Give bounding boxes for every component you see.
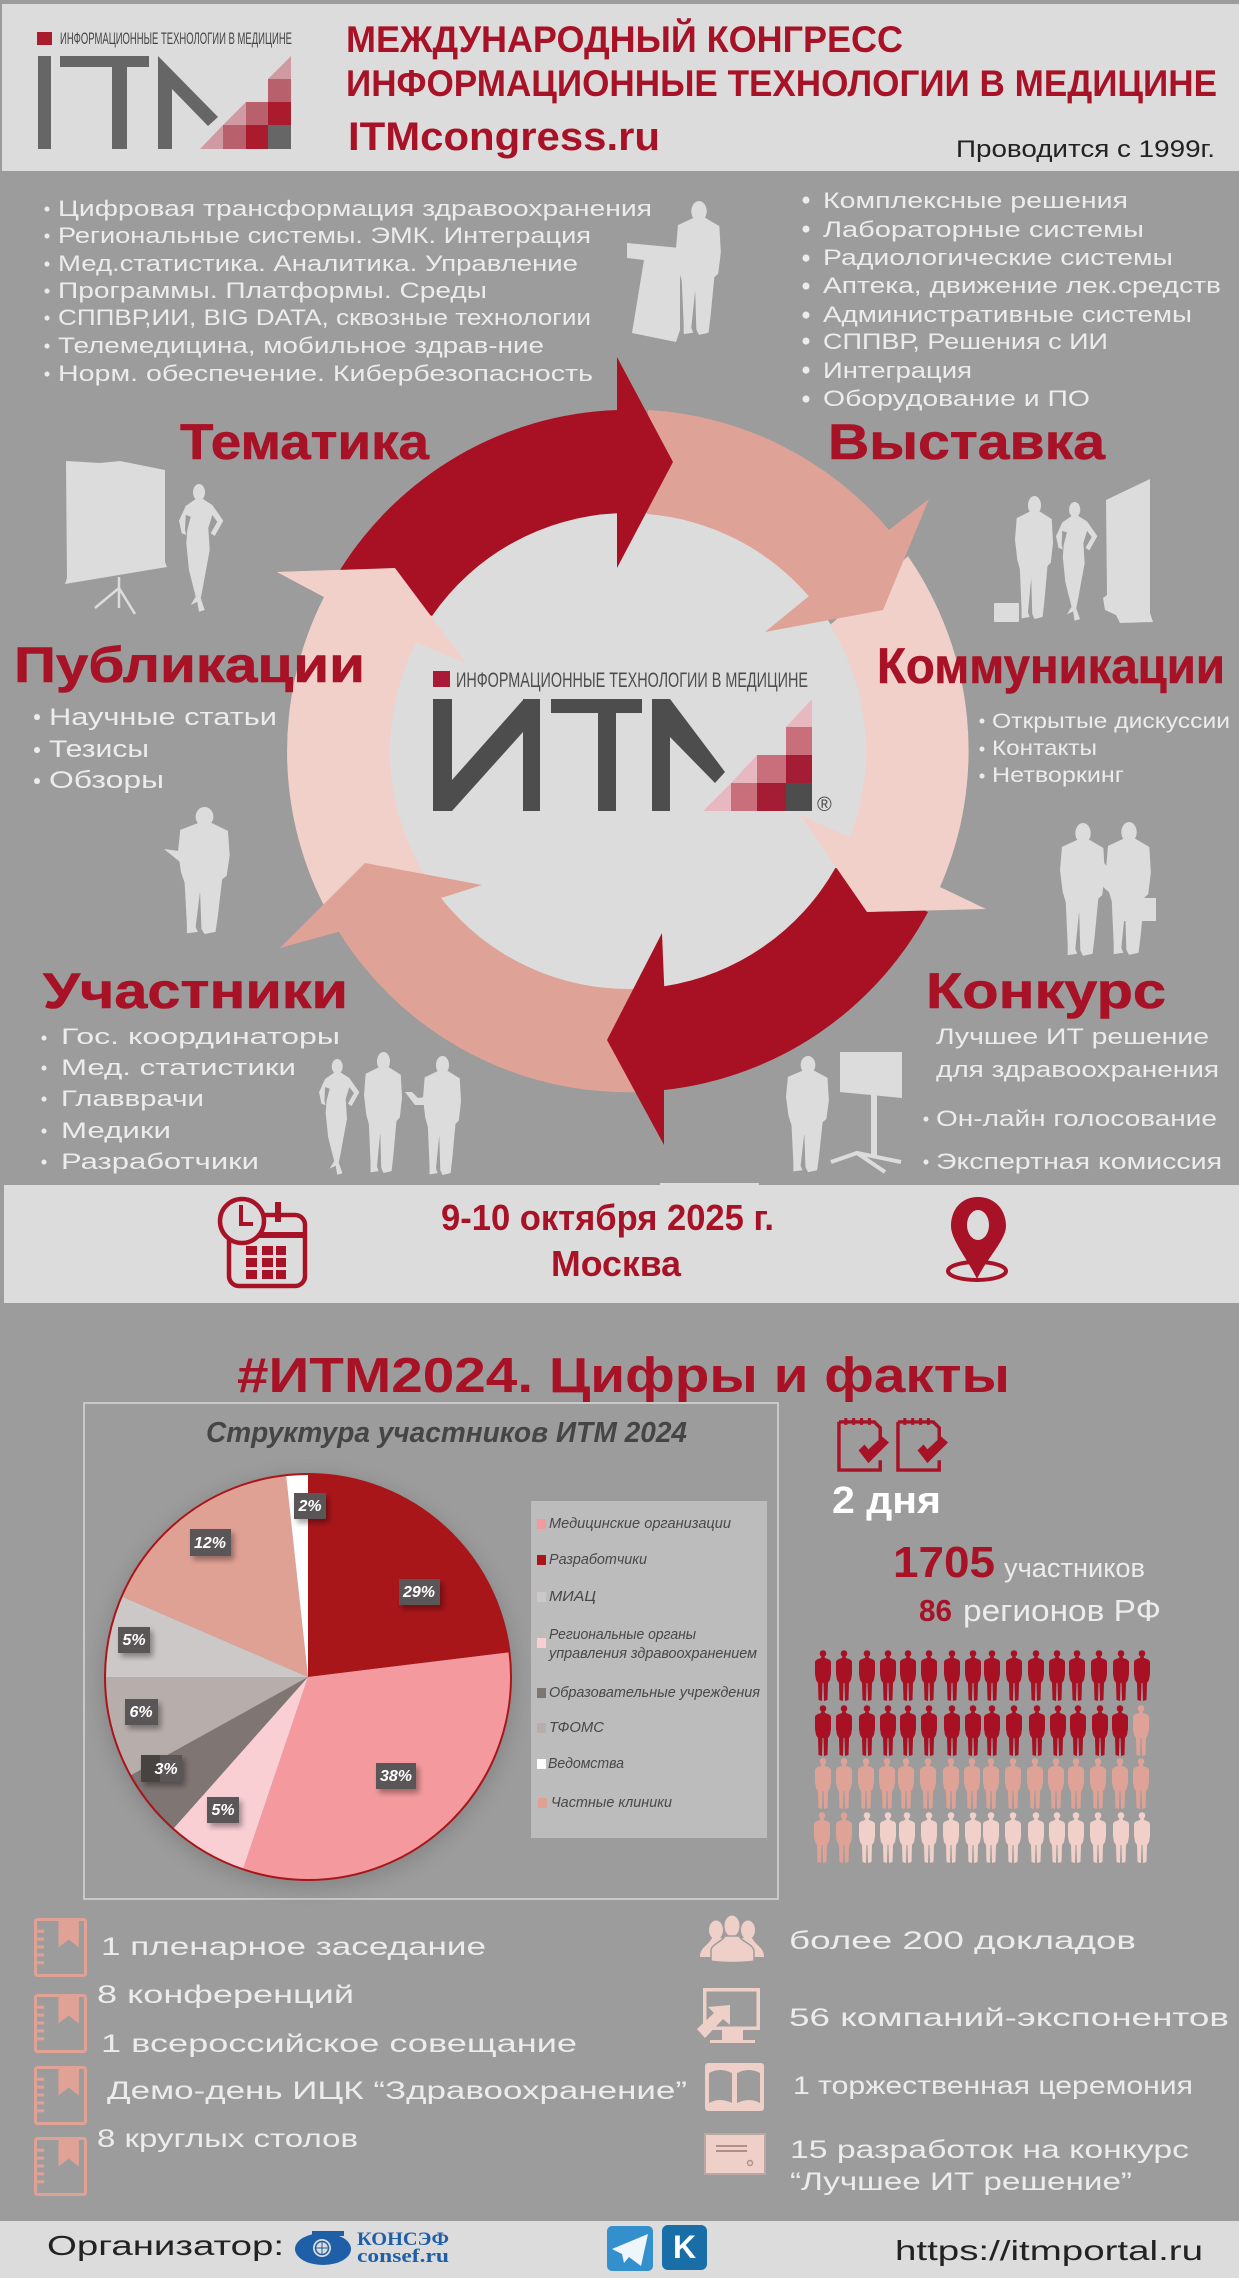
icon: vk: K — [673, 2229, 696, 2265]
list: communications: Контакты — [992, 737, 1097, 760]
icon: presenter with board — [786, 1052, 902, 1172]
legend: ТФОМС — [549, 1719, 604, 1736]
data labels: 29% — [402, 1584, 435, 1601]
center logo: ® — [817, 794, 832, 816]
heading: contest: Конкурс — [926, 963, 1166, 1019]
header title — [346, 18, 1217, 159]
icon: monitor — [697, 1988, 760, 2043]
date text: Москва — [551, 1243, 682, 1284]
arrow: topics — [340, 357, 673, 616]
list: topics — [47, 196, 652, 386]
organizer logo: КОНСЭФ — [357, 2229, 449, 2250]
legend: Ведомства — [548, 1755, 624, 1772]
list: exhibition: Интеграция — [823, 358, 972, 383]
list: programme facts: 8 круглых столов — [97, 2125, 358, 2153]
stat: regions: 86 — [919, 1593, 952, 1628]
list: topics: СППВР,ИИ, BIG DATA, сквозные технологии — [58, 305, 591, 330]
icon: open book — [705, 2063, 764, 2111]
list: publications — [37, 704, 277, 794]
data labels: 12% — [194, 1535, 226, 1552]
list: programme facts: Демо-день ИЦК “Здравоохранение” — [107, 2077, 687, 2105]
section heading: #ИТМ2024. Цифры и факты — [237, 1349, 1010, 1403]
header band — [2, 4, 1239, 171]
list: contest: Лучшее ИТ решение — [936, 1024, 1209, 1049]
heading: publications: Публикации — [14, 637, 365, 693]
data labels: 2% — [297, 1498, 322, 1515]
header title: ITMcongress.ru — [348, 115, 660, 159]
date text: 9-10 октября 2025 г. — [441, 1197, 774, 1238]
date text — [441, 1197, 774, 1284]
legend: Образовательные учреждения — [549, 1684, 760, 1701]
list: exhibition: Лабораторные системы — [823, 217, 1144, 242]
icon: audience — [700, 1915, 764, 1962]
stat: participants — [893, 1538, 1145, 1587]
list: topics: Норм. обеспечение. Кибербезопасность — [58, 361, 593, 386]
date band — [4, 1183, 1239, 1303]
icon: calendar with clock — [220, 1199, 305, 1286]
list: event facts: 1 торжественная церемония — [793, 2072, 1193, 2100]
stat: days: 2 дня — [832, 1480, 941, 1522]
list: event facts: 56 компаний-экспонентов — [789, 2004, 1229, 2032]
arrow: participants — [280, 863, 640, 1092]
list: communications: Открытые дискуссии — [992, 710, 1230, 733]
icon: vk — [662, 2225, 707, 2270]
list: topics: Телемедицина, мобильное здрав-ние — [58, 333, 544, 358]
organizer logo: consef.ru — [357, 2246, 450, 2267]
data labels: 5% — [211, 1802, 235, 1819]
icons: notebooks — [36, 1919, 85, 2195]
list: contest: Экспертная комиссия — [936, 1149, 1222, 1174]
list: topics: Программы. Платформы. Среды — [58, 278, 487, 303]
icon: handshake — [1060, 822, 1156, 956]
icon: man with paper — [164, 807, 230, 934]
list: communications: Нетворкинг — [992, 764, 1124, 787]
list: participants: Медики — [61, 1118, 171, 1143]
list: participants: Разработчики — [61, 1149, 259, 1174]
inner circle — [389, 512, 867, 990]
list: communications — [982, 710, 1230, 787]
icon: exhibitors and banner — [994, 479, 1153, 623]
list: topics: Цифровая трансформация здравоохранения — [58, 196, 652, 221]
heading: exhibition: Выставка — [828, 414, 1106, 470]
since note: Проводится с 1999г. — [956, 136, 1215, 163]
data labels — [118, 1493, 440, 1823]
arrow: communications — [800, 556, 986, 912]
pictogram: participants grid — [814, 1650, 1150, 1863]
list: exhibition: Радиологические системы — [823, 245, 1173, 270]
chart panel — [84, 1403, 778, 1899]
data labels: 5% — [122, 1632, 146, 1649]
legend: Разработчики — [549, 1551, 648, 1568]
list: publications: Научные статьи — [49, 704, 277, 731]
arrow: exhibition — [647, 410, 929, 632]
data labels: 3% — [154, 1761, 178, 1778]
list: programme facts: 1 пленарное заседание — [101, 1933, 486, 1961]
list: event facts: 15 разработок на конкурс — [790, 2136, 1189, 2164]
center logo: ИНФОРМАЦИОННЫЕ ТЕХНОЛОГИИ В МЕДИЦИНЕ — [456, 669, 808, 692]
legend: управления здравоохранением — [548, 1645, 757, 1662]
arrow: contest — [607, 868, 928, 1145]
list: participants: Главврачи — [61, 1086, 204, 1111]
footer — [0, 2221, 1239, 2278]
icon: group of participants — [319, 1052, 461, 1175]
icon: speaker at podium — [627, 201, 721, 342]
heading: communications: Коммуникации — [877, 638, 1225, 694]
organizer label: Организатор: — [47, 2230, 284, 2261]
list: participants: Гос. координаторы — [61, 1024, 340, 1049]
organizer logo — [295, 2229, 450, 2267]
header logo — [37, 30, 292, 149]
icon: projector screen and woman — [65, 461, 223, 614]
icon: telegram — [607, 2226, 653, 2271]
arrow: publications — [277, 568, 466, 917]
heading: participants: Участники — [43, 963, 348, 1019]
pie chart — [103, 1474, 513, 1887]
legend: МИАЦ — [549, 1588, 596, 1605]
icon: location pin — [948, 1197, 1006, 1280]
list: programme facts: 8 конференций — [97, 1981, 354, 2009]
stat: regions: регионов РФ — [963, 1593, 1161, 1628]
header title: ИНФОРМАЦИОННЫЕ ТЕХНОЛОГИИ В МЕДИЦИНЕ — [346, 63, 1217, 104]
list: event facts: “Лучшее ИТ решение” — [790, 2168, 1132, 2196]
heading: topics: Тематика — [180, 414, 430, 470]
list: contest: Он-лайн голосование — [936, 1106, 1217, 1131]
list: publications: Обзоры — [49, 767, 164, 794]
list: exhibition: Административные системы — [823, 302, 1192, 327]
header logo: ИНФОРМАЦИОННЫЕ ТЕХНОЛОГИИ В МЕДИЦИНЕ — [60, 30, 292, 48]
list: exhibition: Комплексные решения — [823, 188, 1128, 213]
legend — [531, 1501, 767, 1838]
list: contest: для здравоохранения — [936, 1057, 1219, 1082]
list: programme facts — [97, 1933, 687, 2153]
data labels: 38% — [380, 1768, 412, 1785]
icon: hardware box — [705, 2134, 765, 2174]
stat: participants: 1705 — [893, 1538, 995, 1587]
list: contest — [926, 1024, 1222, 1174]
data labels: 6% — [129, 1704, 153, 1721]
list: exhibition: СППВР, Решения с ИИ — [823, 329, 1108, 354]
arrowhead: publications — [277, 568, 466, 663]
list: participants — [44, 1024, 340, 1174]
list: publications: Тезисы — [49, 736, 149, 763]
chart title: Структура участников ИТМ 2024 — [206, 1417, 687, 1449]
legend: Частные клиники — [551, 1794, 673, 1811]
icon: two day calendars — [839, 1418, 948, 1470]
header title: МЕЖДУНАРОДНЫЙ КОНГРЕСС — [346, 18, 903, 60]
legend: Региональные органы — [549, 1626, 696, 1643]
list: topics: Региональные системы. ЭМК. Интеграция — [58, 223, 591, 248]
list: participants: Мед. статистики — [61, 1055, 296, 1080]
legend: Медицинские организации — [549, 1515, 732, 1532]
list: exhibition: Аптека, движение лек.средств — [823, 273, 1221, 298]
list: event facts — [789, 1927, 1229, 2196]
list: topics: Мед.статистика. Аналитика. Управление — [58, 251, 578, 276]
list: event facts: более 200 докладов — [789, 1927, 1136, 1955]
stat: participants: участников — [1004, 1553, 1145, 1583]
list: exhibition: Оборудование и ПО — [823, 386, 1090, 411]
website url: https://itmportal.ru — [895, 2235, 1203, 2266]
list: programme facts: 1 всероссийское совещание — [101, 2030, 577, 2058]
list: exhibition — [806, 188, 1221, 411]
center logo — [433, 669, 832, 816]
